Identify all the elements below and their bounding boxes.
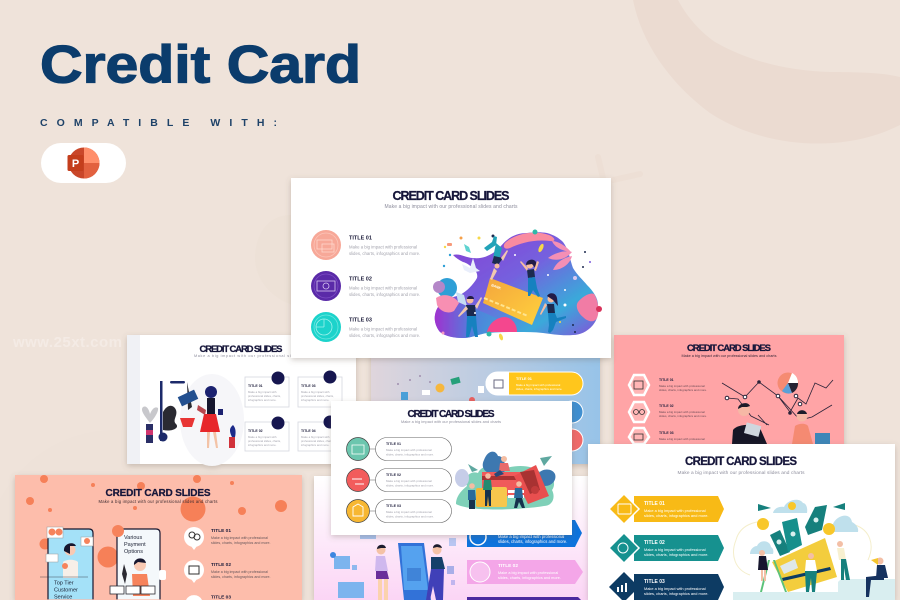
list: three items: slides, charts, infographics and more. [211, 575, 271, 579]
text: tagline: Make a big impact with our professional slides and charts [98, 499, 218, 504]
pill: title 03 [561, 429, 583, 451]
item: title 01 [346, 438, 452, 460]
illustration: line charts and people [722, 372, 833, 444]
card group: titles 01-04: Make a big impact with [301, 390, 330, 394]
phone: various payment options [110, 525, 166, 599]
card group: titles 01-04: professional slides, charts, [248, 394, 281, 398]
card group: titles 01-04: infographics and more. [301, 443, 330, 447]
banner: title 03: Make a big impact with professional [644, 586, 706, 591]
banner: title 03: TITLE 03 [644, 579, 665, 585]
arrow: title 01 [467, 520, 582, 547]
text: tagline: Make a big impact with our professional slides and charts [384, 204, 518, 210]
heading: CREDIT CARD SLIDES [106, 488, 211, 499]
arrow: title 02: TITLE 02 [498, 563, 518, 569]
card group: titles 01-04: professional slides, charts, [301, 394, 334, 398]
list: hexagon items: Make a big impact with professional [659, 437, 705, 441]
pill: title 01 [486, 372, 583, 395]
badge: PowerPoint [41, 143, 126, 183]
item: title 03: slides, charts, infographics and more. [349, 333, 420, 338]
banner: title 03 [609, 572, 724, 600]
banner: title 02: slides, charts, infographics and more. [644, 552, 708, 557]
list: hexagon items: TITLE 02 [659, 404, 674, 408]
item: title 02 [346, 468, 452, 492]
arrow: title 01: slides, charts, infographics and more. [498, 539, 567, 544]
item: title 03: Make a big impact with professional [386, 510, 432, 514]
list: three items: slides, charts, infographics and more. [211, 541, 271, 545]
banner: title 01: Make a big impact with professional [644, 508, 706, 513]
item: title 02 [311, 271, 420, 301]
list: hexagon items [629, 375, 707, 444]
arrow: title 02: slides, charts, infographics and more. [498, 576, 561, 580]
banner: title 01 [609, 494, 724, 524]
heading: CREDIT CARD SLIDES [687, 343, 771, 354]
card group: titles 01-04: Make a big impact with [301, 435, 330, 439]
item: title 01: Make a big impact with professional [349, 244, 417, 250]
panel: slide blue gradient [371, 350, 600, 464]
decorative confetti [442, 236, 591, 341]
panel: slide white with wallets [588, 444, 895, 600]
text: tagline: Make a big impact with our professional slides and charts [194, 354, 326, 358]
pill: title 01: TITLE 01 [516, 377, 532, 381]
list: three items: TITLE 01 [211, 528, 231, 534]
phone: top tier customer service: Customer [54, 588, 78, 594]
list: hexagon items: slides, charts, infographics and more. [659, 388, 707, 392]
item: title 03: Make a big impact with professional [349, 326, 417, 332]
item: title 01: Make a big impact with professional [386, 448, 432, 452]
list: three items [184, 527, 271, 600]
panel: slide main, credit card slides [291, 178, 611, 358]
list: hexagon items: TITLE 01 [659, 378, 674, 382]
icon: PowerPoint logo: P [72, 158, 79, 170]
card group: titles 01-04: Make a big impact with [248, 390, 277, 394]
arrow: title 03 [467, 597, 581, 600]
heading: CREDIT CARD SLIDES [200, 344, 282, 355]
item: title 01: slides, charts, infographics and more. [386, 452, 434, 456]
title: Credit Card [40, 36, 361, 94]
card group: titles 01-04: TITLE 02 [248, 429, 263, 433]
item: title 03: TITLE 03 [386, 504, 401, 508]
phone: top tier customer service: Top Tier [54, 580, 74, 586]
arrow: title 02: Make a big impact with professional [498, 571, 558, 575]
pill: title 01: Make a big impact with professional [516, 383, 561, 387]
card group: titles 01-04: professional slides, charts, [301, 439, 334, 443]
card group: titles 01-04: TITLE 01 [248, 384, 263, 388]
phone: various payment options: Various [124, 535, 142, 541]
item: title 03 [346, 500, 452, 522]
panel: slide grey-white with shopper [127, 335, 356, 466]
banner: title 02: Make a big impact with professional [644, 547, 706, 552]
item: title 01: TITLE 01 [349, 236, 372, 242]
watermark: www.25xt.com [12, 334, 122, 351]
banner: title 01: TITLE 01 [644, 501, 665, 507]
card group: titles 01-04: TITLE 03 [301, 384, 316, 388]
item: title 02: TITLE 02 [349, 276, 372, 282]
arrow: title 02 [467, 560, 583, 584]
item: title 02: slides, charts, infographics and more. [349, 292, 420, 297]
phone: top tier customer service [40, 527, 93, 600]
panel: slide pink gradient with phone [314, 476, 588, 600]
list: three items: Make a big impact with professional [211, 536, 268, 540]
card group: titles 01-04 [245, 370, 342, 451]
heading: CREDIT CARD SLIDES [408, 409, 495, 420]
person: centre woman [520, 260, 540, 297]
card group: titles 01-04: infographics and more. [301, 398, 330, 402]
text: tagline: Make a big impact with our professional slides and charts [401, 420, 501, 424]
list: three items: Make a big impact with professional [211, 570, 268, 574]
item: title 02: TITLE 02 [386, 473, 401, 477]
pill: title 01: slides, charts, infographics and more. [516, 387, 563, 391]
banner: title 01: slides, charts, infographics and more. [644, 513, 708, 518]
subtitle: compatible with: COMPATIBLE WITH: [40, 117, 277, 129]
illustration: shopper and phone [142, 381, 236, 448]
item: title 03: TITLE 03 [349, 318, 372, 324]
card group: titles 01-04: TITLE 04 [301, 429, 316, 433]
heading: CREDIT CARD SLIDES [392, 189, 510, 203]
item: title 02: Make a big impact with professional [349, 286, 417, 290]
person: left man [458, 296, 482, 337]
card group: titles 01-04: infographics and more. [248, 443, 277, 447]
item: title 03: slides, charts, infographics and more. [386, 514, 434, 518]
banner: title 02 [609, 533, 724, 563]
phone: various payment options: Options [124, 549, 143, 555]
panel: slide salmon with phones [15, 475, 302, 600]
illustration: purple blob with credit card and people [433, 230, 602, 341]
card group: titles 01-04: Make a big impact with [248, 435, 277, 439]
list: hexagon items: Make a big impact with professional [659, 410, 705, 414]
item: title 03 [311, 312, 420, 342]
card group: titles 01-04: professional slides, charts, [248, 439, 281, 443]
illustration: people with big phone [330, 535, 456, 600]
item: title 02: Make a big impact with professional [386, 479, 432, 483]
panel: slide middle, three circles [331, 401, 572, 535]
item: title 02: slides, charts, infographics and more. [386, 484, 434, 488]
panel: slide coral with chart [614, 335, 844, 450]
illustration: people on credit cards [455, 452, 555, 510]
heading: CREDIT CARD SLIDES [685, 456, 797, 468]
decorative dots [26, 475, 287, 568]
item: title 01: slides, charts, infographics and more. [349, 251, 420, 256]
banner: title 02: TITLE 02 [644, 540, 665, 546]
list: three items: TITLE 02 [211, 562, 231, 568]
illustration: purple blob with credit card and people: BANK [491, 283, 502, 291]
phone: various payment options: Payment [124, 542, 146, 548]
item: title 01 [311, 230, 420, 260]
text: tagline: Make a big impact with our professional slides and charts [678, 470, 805, 476]
person: flying man [484, 234, 508, 280]
person: right woman [540, 293, 566, 333]
illustration: floating money icons [397, 375, 484, 403]
text: tagline: Make a big impact with our professional slides and charts [682, 354, 777, 358]
arrow: title 01: Make a big impact with professional [498, 534, 564, 539]
list: hexagon items: Make a big impact with professional [659, 384, 705, 388]
list: hexagon items: TITLE 03 [659, 431, 674, 435]
banner: title 03: slides, charts, infographics and more. [644, 591, 708, 596]
card group: titles 01-04: infographics and more. [248, 398, 277, 402]
item: title 01: TITLE 01 [386, 442, 401, 446]
list: hexagon items: slides, charts, infographics and more. [659, 414, 707, 418]
pill: title 02 [561, 401, 583, 423]
illustration: wallet, banknotes and people [733, 500, 895, 600]
